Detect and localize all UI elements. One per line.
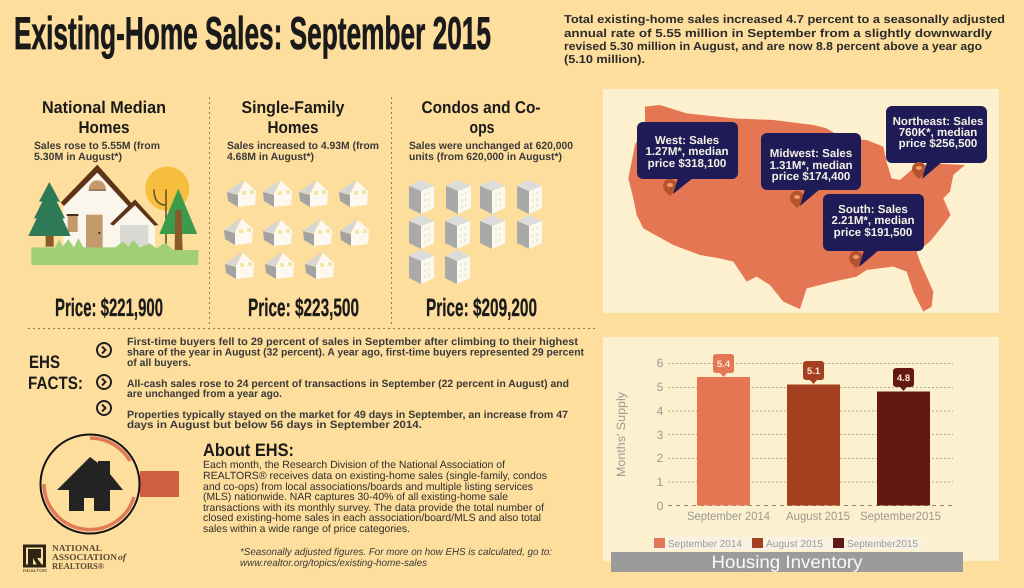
- icon: house in circle with bar: [40, 434, 179, 534]
- intro text block: annual rate of 5.55 million in September from a slightly downwardly: [564, 28, 993, 40]
- text: about EHS: Each month, the Research Division of the National Association of: [203, 459, 505, 471]
- bar: September 2015: 4.8: [897, 373, 910, 384]
- text: EHS facts: of all buyers.: [127, 357, 191, 369]
- text: national sales: [34, 140, 160, 163]
- callout: West: price $318,100: [648, 158, 726, 170]
- x axis labels: [687, 509, 941, 523]
- bar: August 2015: 5.1: [807, 366, 821, 377]
- callout: Northeast: price $256,500: [899, 138, 977, 150]
- y axis labels: 6: [657, 356, 664, 370]
- text: EHS facts: [127, 336, 584, 431]
- legend: August 2015: [766, 539, 823, 550]
- callout: Northeast: Northeast: Sales: [893, 116, 983, 128]
- footnote: [240, 547, 552, 569]
- callout: West: West: Sales: [655, 135, 719, 147]
- text: EHS facts: First-time buyers fell to 29 percent of sales in September after climbing to their highest: [127, 336, 579, 348]
- callout: South: South: Sales: [838, 204, 908, 216]
- text: about EHS: transactions with its monthly survey. The data provide the total number of: [203, 502, 544, 514]
- text: EHS facts: All-cash sales rose to 24 percent of transactions in September (22 percent in August) and: [127, 378, 569, 390]
- text: EHS facts: Properties typically stayed on the market for 49 days in September, an increase from 47: [127, 409, 568, 421]
- text: EHS facts: days in August but below 56 days in September 2014.: [127, 419, 422, 431]
- chart title bar: Housing Inventory: [712, 552, 862, 572]
- price: single-family: Price: $223,500: [248, 294, 359, 322]
- callout: Midwest: Midwest: Sales: [770, 148, 852, 160]
- icons: eleven houses: [224, 180, 369, 279]
- y axis title: Months' Supply: [614, 392, 628, 477]
- price: national: Price: $221,900: [55, 294, 163, 322]
- y axis labels: 3: [657, 428, 664, 442]
- text: condo sales: units (from 620,000 in August*): [409, 151, 562, 163]
- text: EHS facts: share of the year in August (32 percent). A year ago, first-time buyers represented 29 percent: [127, 346, 584, 358]
- heading: national median homes: [42, 98, 166, 137]
- bar: September 2015: [877, 368, 930, 506]
- text: condo sales: Sales were unchanged at 620,000: [409, 140, 573, 152]
- text: EHS facts: are unchanged from a year ago.: [127, 388, 282, 400]
- text: national sales: Sales rose to 5.55M (from: [34, 140, 160, 152]
- icons: ten condo buildings: [409, 180, 542, 284]
- panel: housing inventory chart: [603, 337, 999, 572]
- callout: South: [823, 194, 924, 268]
- logo: National Association of Realtors: of: [118, 552, 127, 562]
- legend: September 2014: [668, 539, 742, 550]
- callout: South: 2.21M*, median: [831, 215, 915, 227]
- logo: National Association of Realtors: [23, 543, 127, 573]
- text: about EHS: REALTORS® receives data on existing-home sales (single-family, condos: [203, 470, 547, 482]
- heading: single-family homes: Homes: [268, 118, 318, 137]
- text: national sales: 5.30M in August*): [34, 151, 122, 163]
- heading: about EHS: About EHS:: [203, 440, 294, 460]
- heading: national median homes: Homes: [78, 118, 130, 137]
- title: Existing-Home Sales: September 2015: [14, 7, 491, 59]
- heading: single-family homes: Single-Family: [242, 98, 345, 117]
- panel: regional map: [603, 89, 999, 313]
- callout: West: [637, 122, 738, 196]
- legend: September2015: [847, 539, 918, 550]
- y axis labels: 0: [657, 499, 664, 513]
- text: condo sales: [409, 140, 573, 163]
- intro text block: Total existing-home sales increased 4.7 percent to a seasonally adjusted: [564, 14, 1005, 26]
- heading: national median homes: National Median: [42, 98, 166, 117]
- callout: Midwest: [761, 133, 861, 208]
- x axis labels: September2015: [860, 509, 941, 523]
- logo: National Association of Realtors: REALTORS®: [52, 561, 104, 571]
- footnote: www.realtor.org/topics/existing-home-sales: [240, 558, 427, 569]
- x axis labels: September 2014: [687, 509, 770, 523]
- bar: September 2014: [697, 354, 750, 506]
- price: condos: Price: $209,200: [426, 294, 537, 322]
- logo: National Association of Realtors: REALTOR: [23, 568, 47, 573]
- intro text block: revised 5.30 million in August, and are now 8.8 percent above a year ago: [564, 41, 982, 53]
- heading: EHS facts: FACTS:: [28, 373, 83, 393]
- icons: fact bullets: [97, 343, 111, 415]
- chart title bar: [611, 552, 963, 572]
- y axis labels: 5: [657, 380, 664, 394]
- y axis labels: 1: [657, 475, 664, 489]
- y axis labels: 4: [657, 404, 664, 418]
- intro text block: [564, 14, 1005, 66]
- callout: Northeast: [886, 106, 987, 179]
- bar: August 2015: [787, 361, 840, 506]
- legend: [653, 537, 923, 550]
- y axis labels: 2: [657, 451, 664, 465]
- panel: condos and co-ops: [409, 98, 573, 322]
- text: about EHS: and co-ops) from local associations/boards and multiple listing services: [203, 481, 533, 493]
- section dividers: [28, 97, 598, 328]
- callout: Northeast: 760K*, median: [899, 127, 977, 139]
- footnote: *Seasonally adjusted figures. For more on how EHS is calculated, go to:: [240, 547, 552, 558]
- text: single-family sales: [227, 140, 379, 163]
- logo: National Association of Realtors: NATIONAL: [52, 543, 102, 553]
- heading: single-family homes: [242, 98, 345, 137]
- y axis labels: [657, 356, 664, 513]
- x axis labels: August 2015: [786, 509, 850, 523]
- bar: September 2014: 5.4: [717, 359, 731, 370]
- text: single-family sales: 4.68M in August*): [227, 151, 314, 163]
- intro text block: (5.10 million).: [564, 54, 645, 66]
- heading: EHS facts: EHS: [29, 352, 60, 372]
- illustration: house with trees and sun: [28, 165, 198, 265]
- callout: West: 1.27M*, median: [645, 146, 729, 158]
- heading: EHS facts: [28, 352, 83, 393]
- panel: single-family homes: [224, 98, 379, 322]
- heading: condos and co-ops: ops: [470, 118, 494, 137]
- chart grid lines: [668, 364, 953, 506]
- text: single-family sales: Sales increased to 4.93M (from: [227, 140, 379, 152]
- callout: Midwest: price $174,400: [772, 171, 850, 183]
- text: about EHS: sales within a wide range of price categories.: [203, 523, 410, 535]
- heading: condos and co-ops: [422, 98, 540, 137]
- heading: condos and co-ops: Condos and Co-: [422, 98, 540, 117]
- callout: South: price $191,500: [834, 227, 912, 239]
- callout: Midwest: 1.31M*, median: [769, 160, 853, 172]
- logo: National Association of Realtors: ASSOCIATION: [52, 552, 118, 562]
- text: about EHS: (MLS) nationwide. NAR captures 30-40% of all existing-home sale: [203, 491, 508, 503]
- map: United States: [628, 105, 965, 312]
- panel: national median homes: [28, 98, 198, 322]
- text: about EHS: [203, 459, 547, 535]
- text: about EHS: closed existing-home sales in each association/board/MLS and also total: [203, 512, 541, 524]
